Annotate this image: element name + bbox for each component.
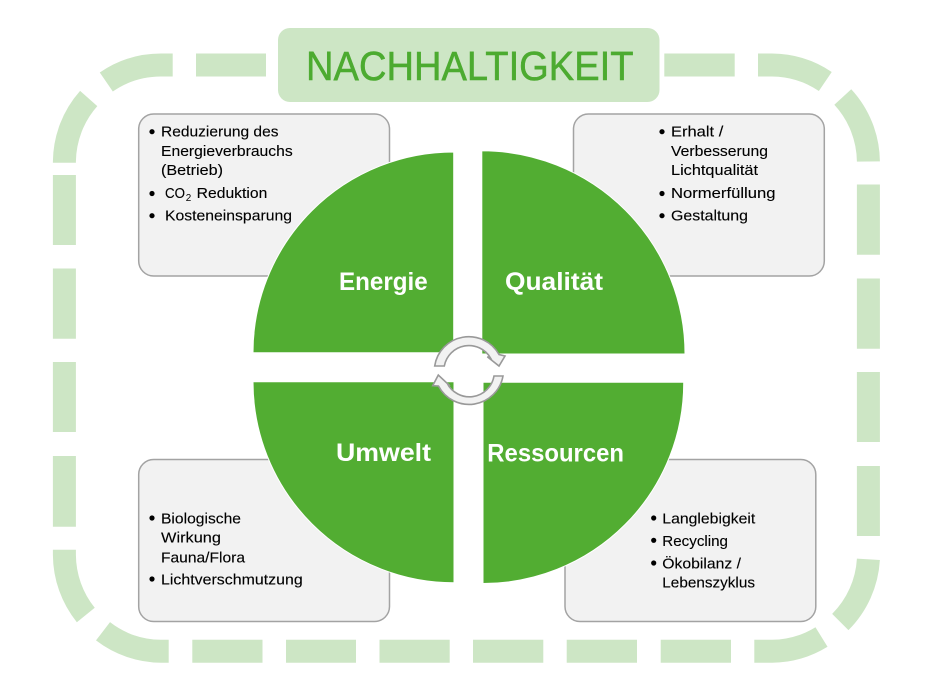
- panel: Umwelt details: [139, 460, 390, 622]
- quadrant: Umwelt: [253, 382, 454, 583]
- quadrant: Ressourcen: [483, 382, 684, 584]
- arrow: top clockwise: [435, 337, 505, 366]
- title: NACHHALTIGKEIT: [306, 43, 634, 89]
- panel: Energie details: [139, 114, 390, 276]
- panel: Umwelt details: Biologische: [161, 510, 241, 527]
- panel: Ressourcen details: Lebenszyklus: [662, 574, 755, 591]
- quadrant: Umwelt: Umwelt: [336, 439, 432, 467]
- panel: Umwelt details: Wirkung: [161, 530, 221, 547]
- panel: Ressourcen details: Ökobilanz /: [662, 554, 742, 572]
- dashed rounded frame: [64, 65, 868, 651]
- panel: Qualität details: Normerfüllung: [671, 185, 776, 202]
- panel: Umwelt details: Lichtverschmutzung: [161, 572, 303, 589]
- panel: Umwelt details: Fauna/Flora: [161, 549, 246, 566]
- quadrant: Energie: [253, 152, 454, 353]
- quadrant: Energie: Energie: [339, 268, 428, 296]
- panel: Energie details: CO: [165, 185, 185, 202]
- quadrant: Ressourcen: Ressourcen: [487, 439, 624, 467]
- panel: Energie details: Reduktion: [197, 185, 267, 202]
- panel: Energie details: Kosteneinsparung: [165, 208, 292, 225]
- panel: Ressourcen details: Langlebigkeit: [662, 510, 756, 527]
- icon: cycle arrows: [433, 337, 505, 404]
- panel: Energie details: (Betrieb): [161, 162, 223, 179]
- title: [278, 28, 660, 102]
- panel: Qualität details: Gestaltung: [671, 208, 748, 225]
- panel: Energie details: Reduzierung des: [161, 124, 278, 141]
- panel: Qualität details: Erhalt /: [671, 124, 724, 141]
- quadrant: Qualität: [482, 151, 685, 354]
- panel: Qualität details: Lichtqualität: [671, 162, 759, 179]
- panel: Energie details: Energieverbrauchs: [161, 143, 293, 160]
- panel: Qualität details: [574, 114, 824, 276]
- panel: Qualität details: Verbesserung: [671, 143, 768, 160]
- quadrant: Qualität: Qualität: [505, 268, 604, 296]
- panel: Ressourcen details: [565, 460, 816, 622]
- arrow: bottom clockwise: [433, 375, 503, 404]
- panel: Ressourcen details: Recycling: [662, 533, 728, 550]
- panel: Energie details: 2: [186, 193, 192, 204]
